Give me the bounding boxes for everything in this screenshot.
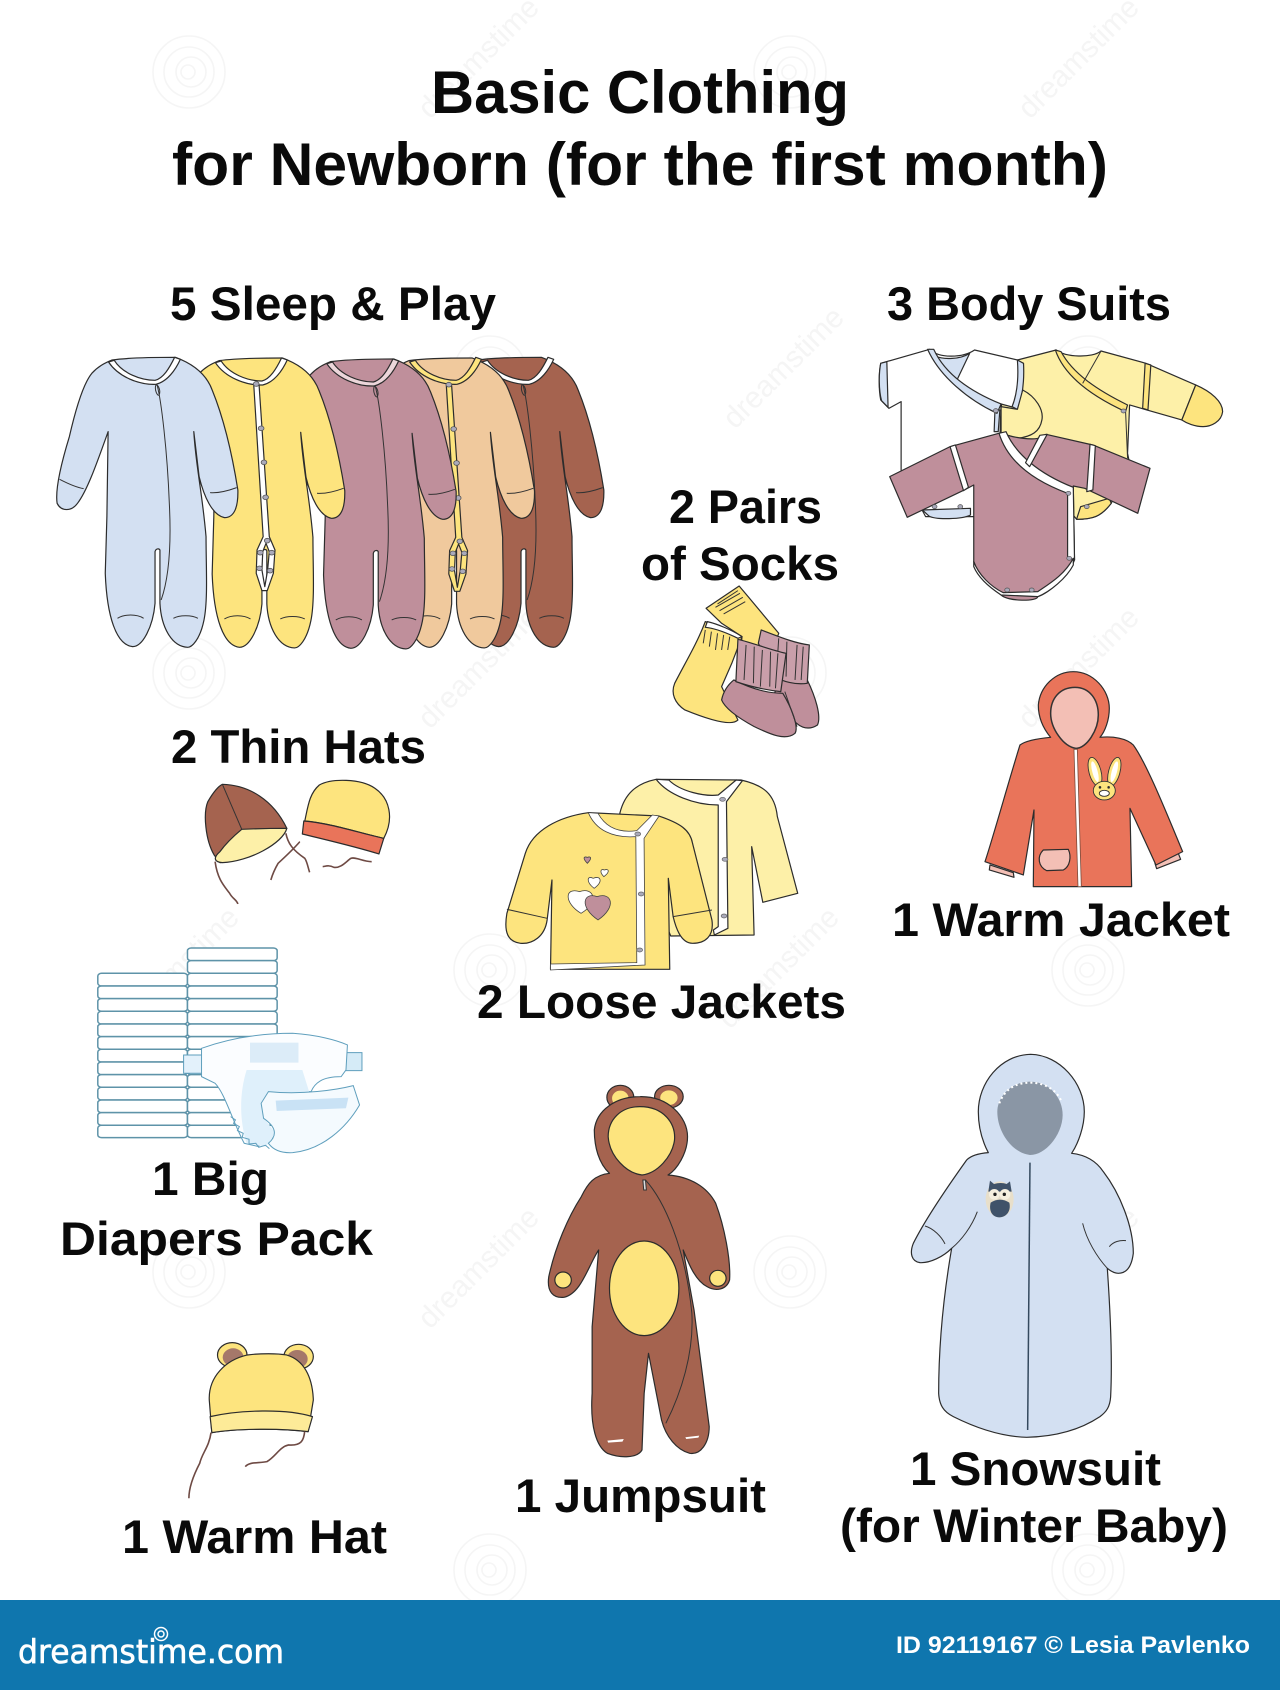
watermark pattern: dreamstime <box>1012 601 1146 735</box>
panel: sleep and play <box>57 277 604 649</box>
label: 1 big diapers pack: 1 Big <box>152 1152 269 1205</box>
label: 2 loose jackets: 2 Loose Jackets <box>477 975 846 1028</box>
panel: warm hat <box>122 1343 387 1563</box>
panel: socks <box>641 480 839 737</box>
title <box>172 59 1108 198</box>
label: 2 pairs of socks <box>641 480 839 590</box>
panel: loose jackets <box>477 779 846 1028</box>
panel: snowsuit <box>840 1054 1228 1552</box>
icon: diapers stack <box>98 948 362 1153</box>
label: 1 snowsuit for winter baby <box>840 1442 1228 1552</box>
icon: snowsuit <box>911 1054 1133 1437</box>
icon: bear jumpsuit <box>548 1085 730 1457</box>
panel: warm jacket <box>892 672 1230 946</box>
footer credit: ID 92119167 © Lesia Pavlenko <box>896 1632 1250 1659</box>
panel: jumpsuit <box>515 1085 766 1522</box>
icon: hearts <box>568 857 610 920</box>
watermark pattern: dreamstime <box>712 901 846 1035</box>
icon: socks and booties <box>673 586 819 737</box>
watermark pattern: dreamstime <box>412 601 546 735</box>
watermark pattern: dreamstime <box>412 1201 546 1335</box>
icon: warm hat <box>189 1343 313 1498</box>
label: 1 big diapers pack <box>60 1152 374 1265</box>
footer bar <box>0 1600 1280 1690</box>
title: for Newborn (for the first month) <box>172 131 1108 198</box>
title: Basic Clothing <box>431 59 849 126</box>
label: 2 pairs of socks: 2 Pairs <box>669 480 822 533</box>
icon: warm jacket <box>985 672 1183 887</box>
watermark pattern: dreamstime <box>112 901 246 1035</box>
icon: five sleepers <box>57 357 604 649</box>
icon: bunny patch <box>1085 756 1124 800</box>
icon: owl patch <box>986 1181 1014 1217</box>
label: 1 warm hat: 1 Warm Hat <box>122 1510 387 1563</box>
label: 1 big diapers pack: Diapers Pack <box>60 1212 374 1265</box>
icon: three body suits <box>879 349 1223 600</box>
label: 2 pairs of socks: of Socks <box>641 537 839 590</box>
panel: diapers <box>60 948 374 1265</box>
panel: body suits <box>879 277 1223 600</box>
watermark pattern: dreamstime <box>1012 1201 1146 1335</box>
label: 2 thin hats: 2 Thin Hats <box>171 720 426 773</box>
icon: diaper <box>184 1033 362 1153</box>
label: 1 warm jacket: 1 Warm Jacket <box>892 893 1230 946</box>
label: 1 snowsuit for winter baby: (for Winter Baby) <box>840 1499 1228 1552</box>
icon: two thin hats <box>205 780 390 904</box>
label: 1 snowsuit for winter baby: 1 Snowsuit <box>910 1442 1161 1495</box>
watermark pattern <box>112 0 1146 1606</box>
watermark pattern: dreamstime <box>717 301 851 435</box>
label: 3 body suits: 3 Body Suits <box>887 277 1171 330</box>
panel: thin hats <box>171 720 426 904</box>
icon: two loose jackets <box>506 779 798 970</box>
footer logo: dreamstime.com <box>18 1632 284 1671</box>
label: 1 jumpsuit: 1 Jumpsuit <box>515 1469 766 1522</box>
label: 5 sleep and play: 5 Sleep & Play <box>170 277 496 330</box>
